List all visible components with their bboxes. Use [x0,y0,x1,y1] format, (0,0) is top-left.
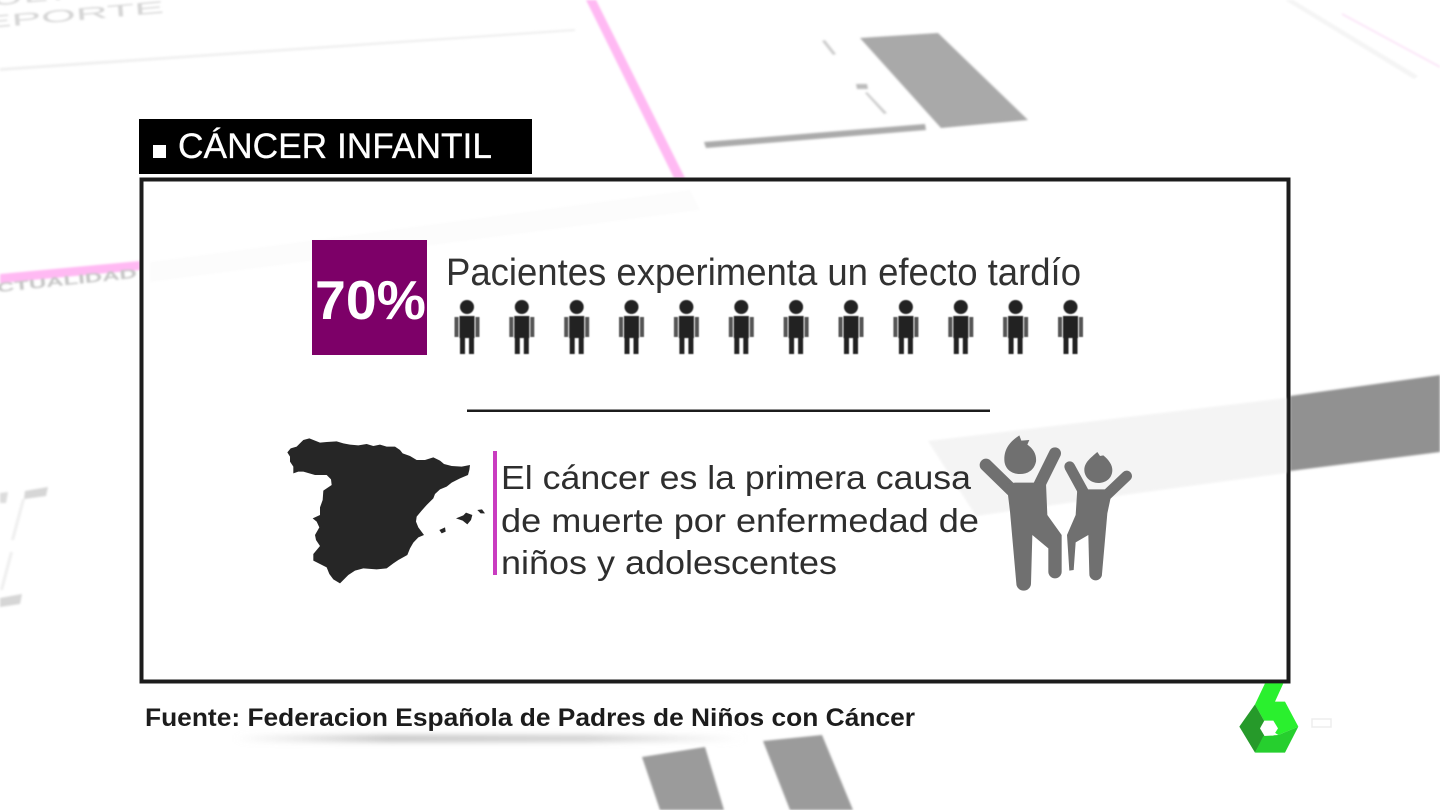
stat box: 70% [312,240,427,355]
source shadow [235,735,745,742]
icon: two jumping children [986,435,1127,591]
faint background traces inside frame [150,190,1286,516]
title bar: CÁNCER INFANTIL [178,127,492,166]
icon: map of Spain [287,438,485,583]
text block: leading cause: El cáncer es la primera causa [501,459,972,496]
pink divider [493,451,497,575]
text block: leading cause: de muerte por enfermedad de [501,502,979,539]
icon row: twelve people [454,300,1083,354]
small logo tag [1312,719,1331,727]
text block: leading cause: niños y adolescentes [501,544,837,581]
title bar [139,119,532,174]
logo: laSexta [1239,683,1298,753]
heading: late effect: Pacientes experimenta un efecto tardío [446,252,1081,294]
stat box: 70%: 70% [315,269,426,331]
source line: Fuente: Federacion Española de Padres de Niños con Cáncer [145,704,915,732]
text block: leading cause [501,459,979,581]
panel: main frame [142,180,1288,682]
